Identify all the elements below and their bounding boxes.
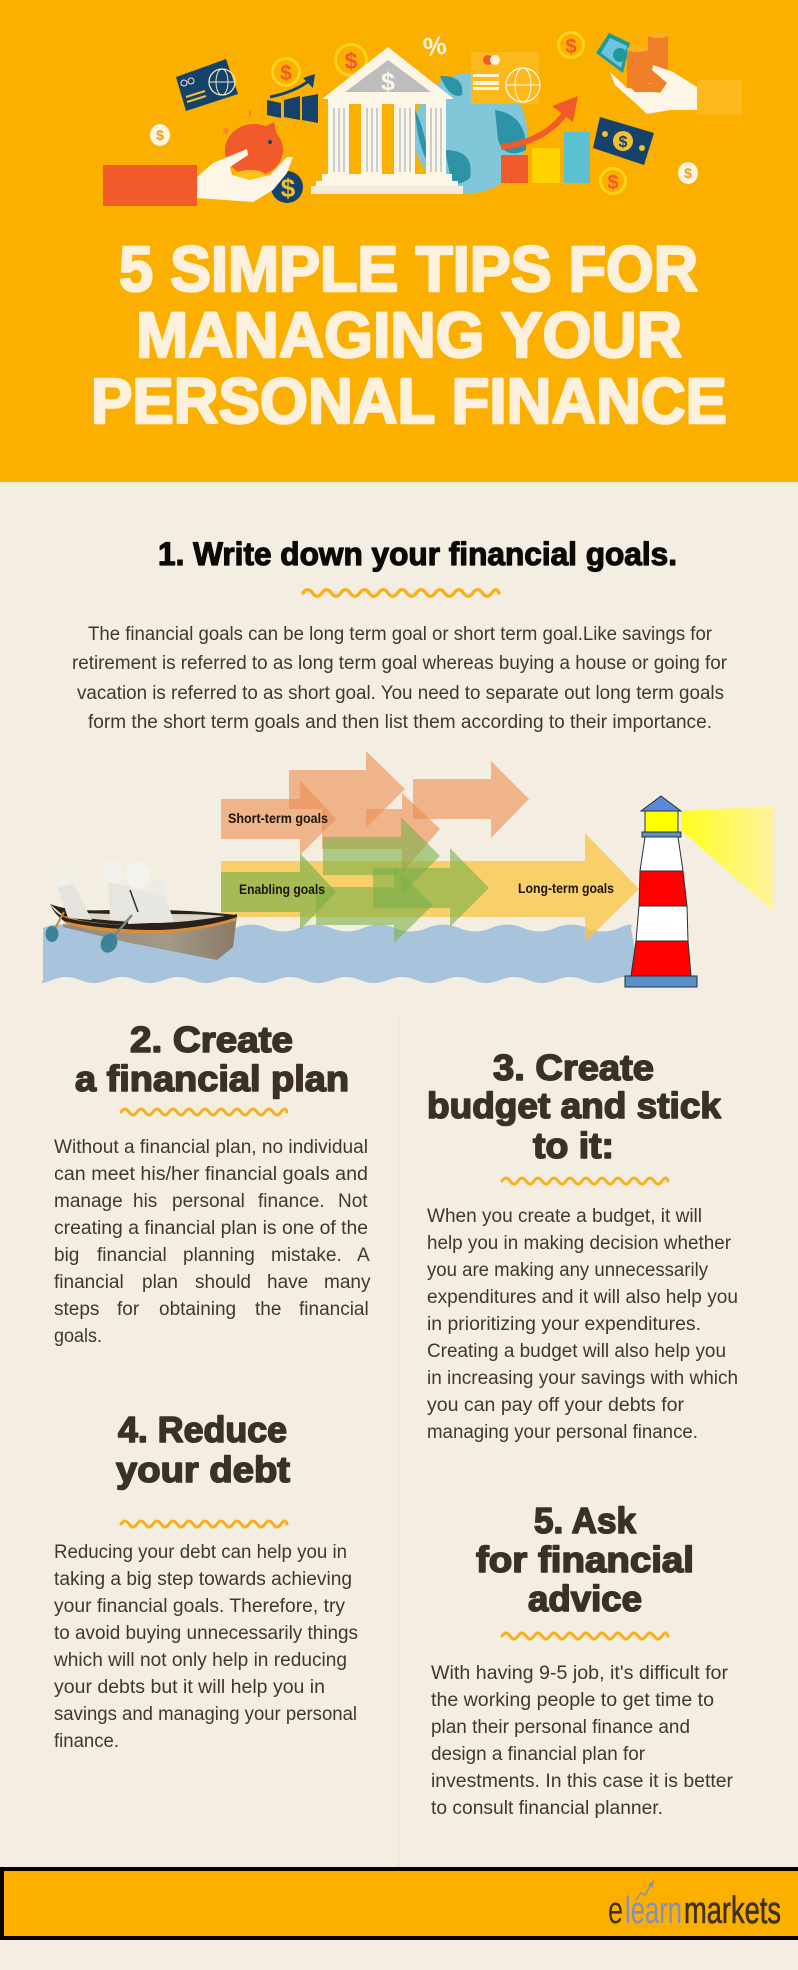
arrow: enabling 1: [221, 853, 336, 930]
text: tip 2 body: Without a financial plan, no individual: [54, 1137, 368, 1158]
text: tip 2 body: manage: [54, 1191, 123, 1212]
icon: piggy bank: [223, 110, 283, 180]
text: tip 2 body: financial: [299, 1299, 369, 1320]
label: enabling goals: Enabling goals: [239, 881, 325, 897]
divider: squiggle tip 2: [121, 1109, 287, 1115]
text: tip 5 body: to consult financial planner.: [431, 1798, 663, 1819]
icon: coin upper right: [557, 31, 585, 59]
arrow: short-term 3: [413, 761, 529, 838]
icon: coin: [271, 57, 301, 87]
icon: navy coin: $: [281, 173, 296, 203]
icon: right hand with coins: [596, 32, 742, 115]
text: tip 3 body: in increasing your savings with which: [427, 1368, 738, 1389]
icon: white coin right: $: [684, 165, 692, 181]
text: tip 4 body: which will not only help in reducing: [53, 1650, 347, 1671]
arrow: enabling 3: [316, 867, 433, 943]
text: tip 2 body: financial: [97, 1245, 167, 1266]
arrow: short-term 1: [221, 780, 336, 855]
panel: tip 5: [431, 1500, 734, 1819]
icon: rising arrow: [501, 96, 578, 147]
icon: white coin left: $: [156, 127, 164, 143]
figures: [54, 860, 174, 924]
arrow: enabling 2: [323, 817, 440, 895]
text: tip 2 body: [54, 1137, 371, 1347]
icon: banknote: $: [619, 134, 628, 151]
text: tip 5 body: investments. In this case it is better: [431, 1771, 734, 1792]
icon: credit card: [176, 59, 238, 111]
label: long-term goals: Long-term goals: [518, 880, 614, 896]
panel: tip 3: [427, 1047, 738, 1443]
divider: squiggle tip 1: [303, 590, 499, 596]
panel: tip 2: [54, 1019, 371, 1347]
heading: tip 2: [75, 1019, 349, 1099]
text: tip 2 body: planning: [183, 1245, 255, 1266]
text: tip 4 body: finance.: [54, 1731, 119, 1752]
text: tip 4 body: savings and managing your personal: [54, 1704, 357, 1725]
text: tip 3 body: in prioritizing your expenditures.: [427, 1314, 701, 1335]
text: tip 5 body: With having 9-5 job, it's difficult for: [431, 1663, 729, 1684]
icon: coin lower right: [599, 167, 627, 195]
logo: elearnmarkets: learn: [625, 1890, 682, 1932]
text: tip 4 body: [53, 1542, 358, 1752]
text: tip 4 body: your debts but it will help you in: [54, 1677, 325, 1698]
text: tip 2 body: goals.: [54, 1326, 102, 1347]
icon: white coin left: [150, 124, 170, 146]
icon: coin: $: [280, 62, 292, 85]
arrow: short-term 2: [289, 751, 405, 828]
heading: tip 1: 1. Write down your financial goals.: [158, 536, 677, 572]
heading: tip 3: 3. Create: [493, 1047, 654, 1088]
text: tip 2 body: for: [117, 1299, 140, 1320]
text: tip 2 body: A: [357, 1245, 370, 1266]
arrow: long-term goals: [221, 833, 639, 942]
text: tip 2 body: personal: [172, 1191, 245, 1212]
label: short-term goals: Short-term goals: [228, 810, 328, 826]
text: tip 1 body: retirement is referred to as long term goal whereas buying a house or going for: [72, 653, 728, 674]
icon: percent sign: %: [421, 30, 448, 62]
divider: squiggle tip 3: [502, 1178, 668, 1184]
text: tip 5 body: design a financial plan for: [431, 1744, 646, 1765]
icon: banknote: [593, 117, 654, 165]
text: tip 3 body: expenditures and it will also help you: [427, 1287, 738, 1308]
title: PERSONAL FINANCE: [91, 365, 727, 437]
title: MANAGING YOUR: [136, 299, 682, 371]
icon: bank building: [311, 47, 463, 194]
lighthouse: [625, 796, 774, 987]
icon: rising bars: [501, 132, 590, 183]
icon: orange card: [471, 52, 540, 104]
panel: tip 4: [53, 1409, 358, 1752]
text: tip 3 body: When you create a budget, it will: [427, 1206, 702, 1227]
text: tip 3 body: help you in making decision whether: [427, 1233, 732, 1254]
icon: globe: [413, 73, 527, 193]
logo: elearnmarkets: [608, 1880, 781, 1932]
text: tip 3 body: [427, 1206, 738, 1443]
text: tip 2 body: finance.: [258, 1191, 325, 1212]
arrow: enabling 4: [373, 848, 489, 927]
text: tip 3 body: managing your personal finance.: [427, 1422, 698, 1443]
boat with rowers: [46, 860, 237, 960]
text: tip 1 body: The financial goals can be long term goal or short term goal.Like savings for: [88, 624, 713, 645]
icon: navy growth bars: [267, 74, 318, 123]
icon: coin upper right: $: [565, 36, 577, 58]
heading: tip 4: [116, 1409, 290, 1490]
divider: squiggle tip 5: [502, 1633, 668, 1639]
hull: [63, 915, 237, 960]
heading: tip 4: 4. Reduce: [118, 1409, 287, 1450]
diagram: boat to lighthouse goals: [42, 751, 774, 987]
text: tip 1 body: form the short term goals and then list them according to their importance.: [88, 712, 712, 733]
text: tip 2 body: financial: [54, 1272, 124, 1293]
text: tip 4 body: to avoid buying unnecessarily things: [54, 1623, 358, 1644]
heading: tip 5: advice: [528, 1578, 642, 1619]
text: tip 2 body: can meet his/her financial goals and: [54, 1164, 368, 1185]
oars: [52, 912, 64, 934]
icon: coin lower right: $: [607, 172, 619, 194]
logo: elearnmarkets: e: [608, 1890, 623, 1932]
panel: header: [0, 0, 798, 490]
heading: tip 5: [476, 1500, 694, 1619]
far rim and boat interior: [50, 904, 237, 927]
text: tip 2 body: his: [133, 1191, 157, 1212]
text: tip 5 body: the working people to get time to: [431, 1690, 714, 1711]
footer bar: [0, 1867, 798, 1940]
heading: tip 5: for financial: [476, 1539, 694, 1580]
text: tip 2 body: creating a financial plan is one of the: [54, 1218, 368, 1239]
text: tip 5 body: [431, 1663, 734, 1819]
text: tip 3 body: you are making any unnecessarily: [427, 1260, 708, 1281]
heading: tip 3: to it:: [533, 1125, 614, 1166]
title: [91, 233, 727, 437]
column divider: [398, 1015, 400, 1867]
text: tip 3 body: Creating a budget will also help you: [427, 1341, 726, 1362]
title: 5 SIMPLE TIPS FOR: [119, 233, 698, 305]
text: tip 2 body: Not: [338, 1191, 368, 1212]
heading: tip 2: a financial plan: [75, 1058, 349, 1099]
text: tip 2 body: should: [195, 1272, 251, 1293]
icon: coin behind bank: [334, 43, 368, 77]
icon: coin behind bank: $: [345, 48, 358, 74]
text: tip 1 body: vacation is referred to as short goal. You need to separate out long term goals: [77, 683, 724, 704]
text: tip 2 body: steps: [54, 1299, 99, 1320]
heading: tip 2: 2. Create: [130, 1019, 293, 1060]
icon: navy coin: [271, 171, 303, 203]
text: tip 3 body: you can pay off your debts for: [427, 1395, 685, 1416]
heading: tip 3: [427, 1047, 722, 1166]
divider: squiggle tip 4: [121, 1521, 287, 1527]
icon: white coin right: [678, 162, 698, 184]
icon: left hand with sleeve: [103, 149, 293, 206]
text: tip 4 body: Reducing your debt can help you in: [54, 1542, 347, 1563]
text: tip 4 body: your financial goals. Therefore, try: [54, 1596, 346, 1617]
text: tip 2 body: have: [267, 1272, 308, 1293]
text: tip 2 body: many: [324, 1272, 371, 1293]
text: tip 1 body: [72, 624, 728, 733]
heading: tip 4: your debt: [116, 1449, 290, 1490]
text: tip 5 body: plan their personal finance and: [431, 1717, 690, 1738]
heading: tip 3: budget and stick: [427, 1085, 722, 1126]
illustration: finance scene: [103, 30, 742, 206]
heading: tip 5: 5. Ask: [534, 1500, 637, 1541]
text: tip 4 body: taking a big step towards achieving: [54, 1569, 352, 1590]
text: tip 2 body: mistake.: [271, 1245, 342, 1266]
arrow: short-term 4: [322, 793, 440, 873]
water: [42, 924, 640, 983]
text: tip 2 body: obtaining: [159, 1299, 236, 1320]
icon: bank building: $: [381, 68, 395, 96]
text: tip 2 body: plan: [142, 1272, 178, 1293]
text: tip 2 body: the: [255, 1299, 281, 1320]
text: tip 2 body: big: [54, 1245, 79, 1266]
